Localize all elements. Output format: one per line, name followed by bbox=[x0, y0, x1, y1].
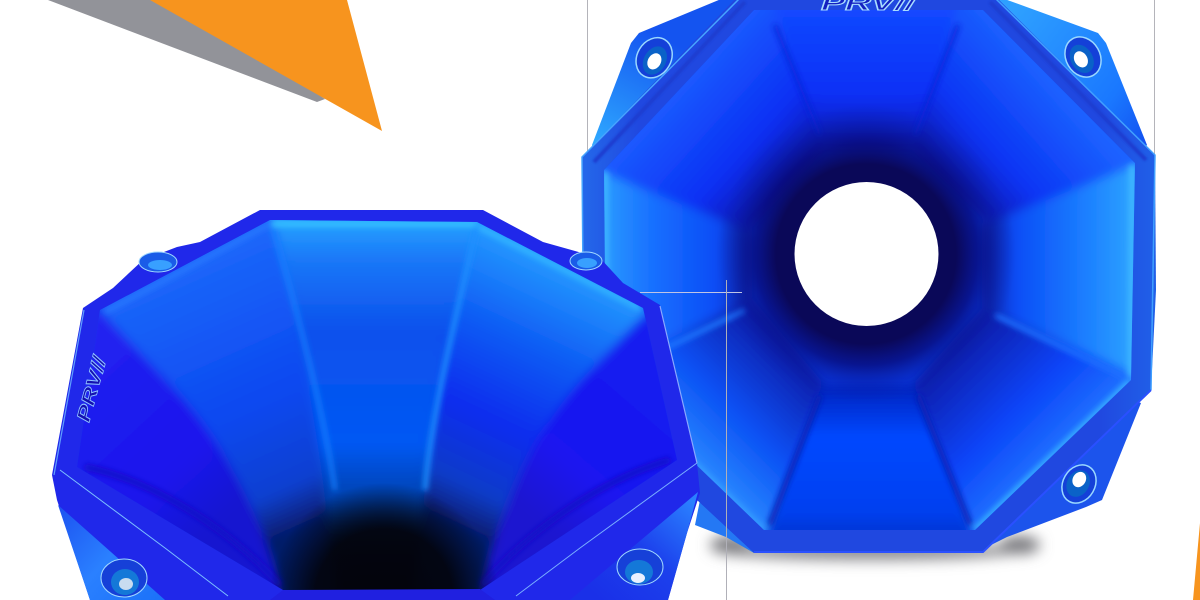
lower right ear bbox=[570, 492, 698, 600]
right horn bbox=[582, 0, 1156, 553]
facet: upper right bbox=[914, 10, 1135, 224]
facet: far right bbox=[480, 308, 695, 600]
facet: right bbox=[982, 160, 1150, 382]
facet: bottom bbox=[767, 382, 972, 530]
screw hole top right bbox=[1058, 30, 1108, 84]
logo on left horn: PRV// bbox=[74, 353, 112, 424]
facet: top bbox=[778, 10, 954, 148]
orange triangle top left bbox=[150, 0, 382, 131]
screw hole lower right bbox=[617, 549, 663, 585]
crop guide lines bbox=[588, 0, 1154, 160]
facet creases bbox=[605, 25, 1132, 530]
shadow under right horn bbox=[710, 536, 1040, 560]
facet: far left bbox=[77, 310, 282, 588]
orange sliver bottom right bbox=[1193, 523, 1200, 600]
mounting ears bbox=[592, 0, 1147, 553]
facet: upper left bbox=[604, 10, 821, 232]
screw hole lower left bbox=[101, 559, 147, 597]
throat shadow bbox=[716, 104, 1016, 404]
screw hole upper right bbox=[570, 252, 602, 270]
facet: lower left bbox=[671, 298, 826, 530]
throat hole bbox=[794, 182, 938, 326]
facet: center bbox=[270, 205, 480, 600]
throat darkness bbox=[272, 485, 496, 590]
facet: left bbox=[590, 168, 752, 380]
screw hole top left bbox=[629, 31, 679, 84]
screw hole upper left bbox=[139, 252, 177, 272]
horn body rim bbox=[582, 0, 1156, 553]
horn interior facets bbox=[590, 0, 1150, 545]
creases and highlights bbox=[85, 224, 670, 585]
guide lines over right horn bbox=[640, 280, 742, 600]
horn interior facets bbox=[77, 220, 677, 590]
facet: upper left bbox=[99, 220, 334, 590]
screw hole bottom right bbox=[1055, 459, 1103, 509]
grey triangle top left bbox=[48, 0, 325, 102]
facet: upper right bbox=[416, 222, 646, 590]
lower left ear bbox=[58, 505, 165, 600]
facet: lower right bbox=[910, 308, 1131, 530]
rim highlights bbox=[582, 0, 1155, 552]
left horn bbox=[52, 205, 700, 600]
lower rim of throat bbox=[270, 589, 495, 600]
horn body bbox=[52, 210, 700, 600]
rim band bbox=[54, 306, 697, 596]
